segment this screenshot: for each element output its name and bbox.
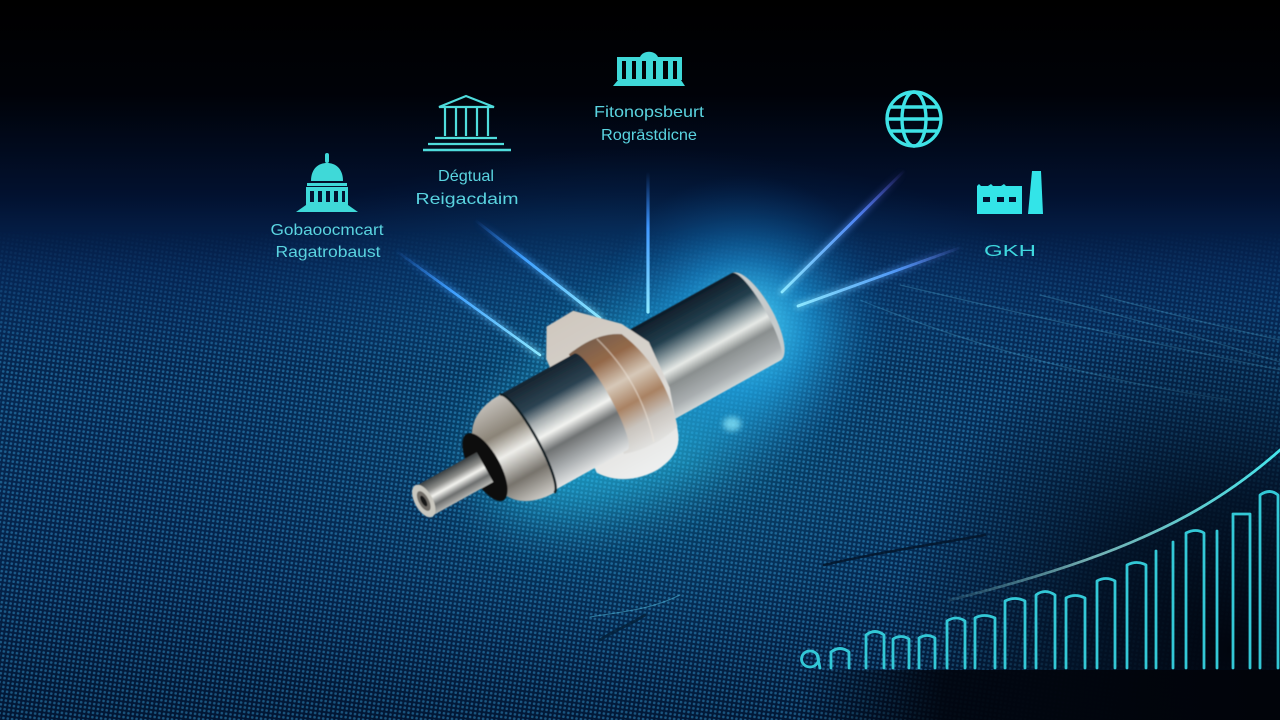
dark floor streaks <box>590 535 985 640</box>
label: digital regulation: Dégtual <box>438 168 494 185</box>
bronze collar <box>568 320 686 459</box>
trend curve <box>950 450 1280 600</box>
rear cylinder <box>616 265 795 425</box>
beam to international regulation <box>644 172 652 312</box>
icon: columned institution <box>613 52 685 86</box>
icon: capitol building <box>296 153 358 212</box>
bar chart outlines <box>802 492 1278 668</box>
beam to digital regulation <box>475 220 600 318</box>
icon: factory <box>977 171 1043 214</box>
label: international regulation <box>594 104 705 144</box>
sensor: metal cylinder <box>370 226 813 581</box>
label: factory: GKH <box>984 243 1036 260</box>
mounting flange plate <box>522 286 705 496</box>
dark corner behind chart <box>880 310 1280 720</box>
icon: globe <box>887 92 941 146</box>
pin tip <box>407 481 440 521</box>
beam to government regulation <box>395 250 540 355</box>
label: government regulation <box>270 222 384 261</box>
label: digital regulation <box>416 168 518 208</box>
beam to globe <box>782 170 905 292</box>
label: international regulation: Rogrāstdicne <box>601 127 697 144</box>
main body <box>500 349 636 491</box>
label: government regulation: Ragatrobaust <box>276 244 381 261</box>
beam to factory <box>798 247 962 306</box>
pin <box>416 452 493 516</box>
nose section <box>461 390 564 514</box>
label: international regulation: Fitonopsbeurt <box>594 104 705 121</box>
dotted grid floor <box>0 230 1280 720</box>
black rubber ring <box>453 427 517 508</box>
bottom dark band under chart <box>800 670 1280 720</box>
small light flare on floor <box>723 417 741 431</box>
label: government regulation: Gobaoocmcart <box>270 222 384 239</box>
label: digital regulation: Reigacdaim <box>416 191 518 208</box>
glow behind sensor <box>448 175 895 566</box>
beams radiating from the sensor to the icons <box>395 170 962 355</box>
icon: classical bank building <box>423 96 511 150</box>
perspective lines on right of floor <box>860 285 1280 400</box>
